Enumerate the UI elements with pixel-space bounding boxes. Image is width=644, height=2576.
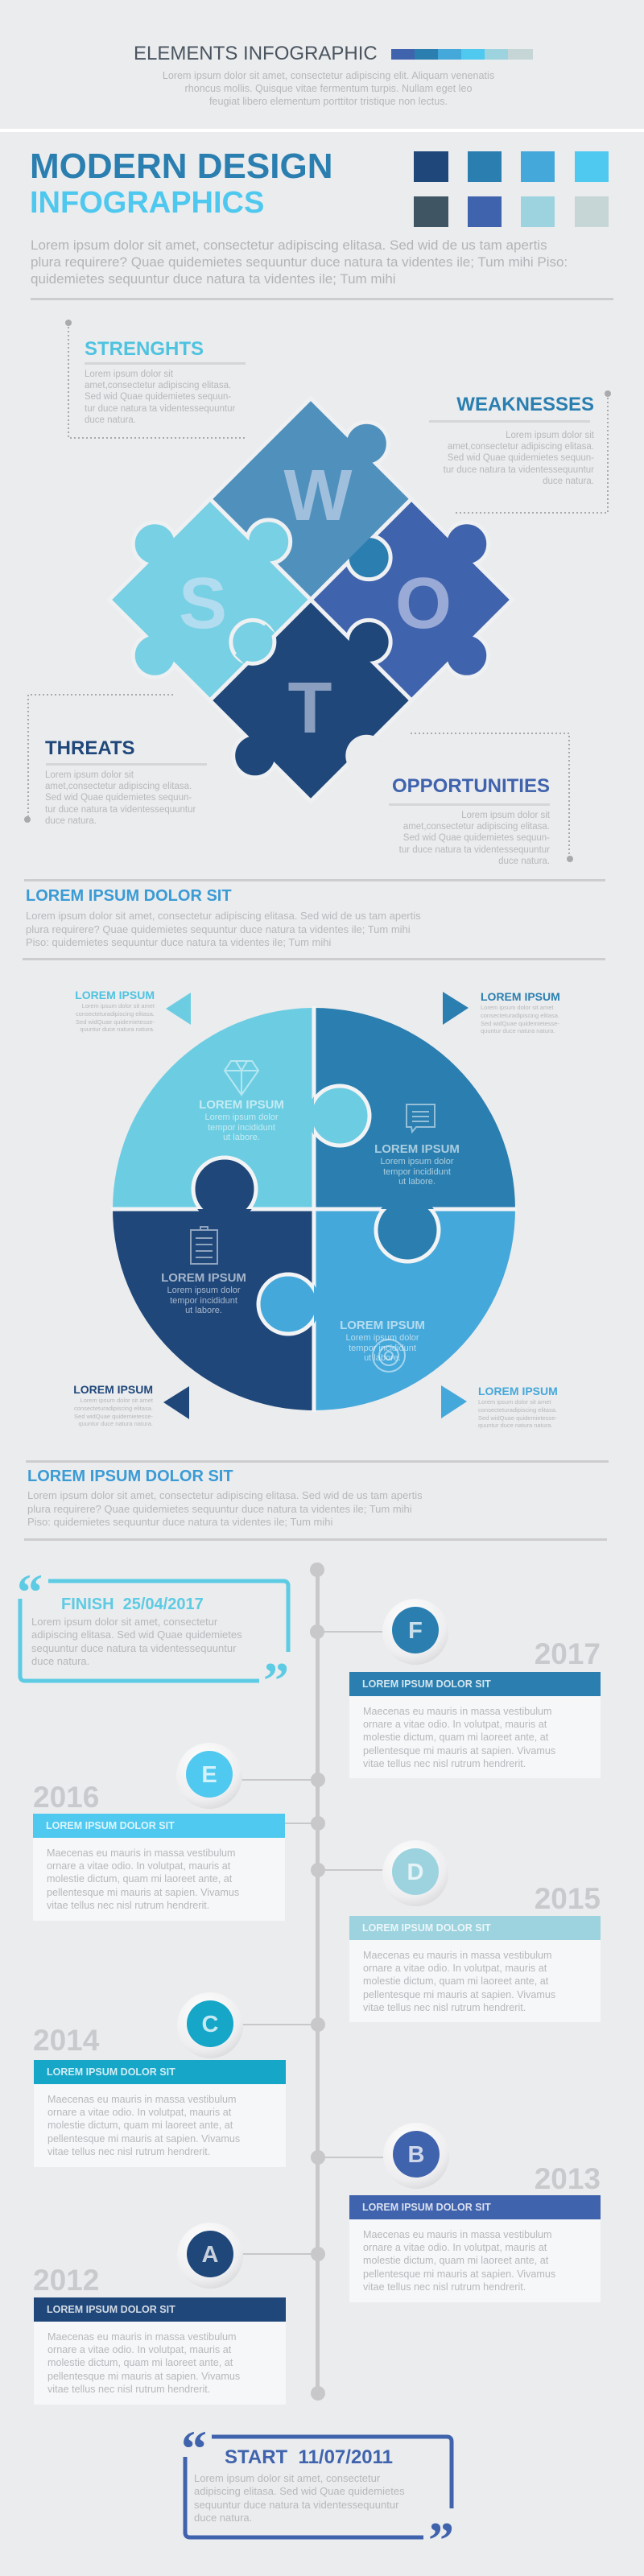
swot: strengths: Lorem ipsum dolor sit <box>85 369 173 379</box>
swot: strengths: Sed wid Quae quidemietes sequun- <box>85 392 231 402</box>
side label TL: quuntur duce natura natura. <box>80 1026 155 1033</box>
card C: pellentesque mi mauris at sapien. Vivamus <box>47 2133 240 2145</box>
card A: ornare a vitae odio. In volutpat, mauris at <box>47 2344 231 2355</box>
finish callout: “ <box>17 1563 43 1620</box>
icon: target <box>373 1340 405 1372</box>
icon: clipboard <box>191 1227 217 1264</box>
side label BL: Lorem ipsum dolor sit amet <box>80 1397 153 1404</box>
side label TR: LOREM IPSUM <box>481 990 560 1003</box>
timeline circles: B <box>408 2142 424 2168</box>
finish callout <box>17 1563 289 1709</box>
swot: opportunities: Sed wid Quae quidemietes sequun- <box>403 833 550 843</box>
card D: vitae tellus nec nisl rutrum hendrerit. <box>363 2002 526 2013</box>
swot: weaknesses: Lorem ipsum dolor sit <box>506 431 594 440</box>
card D: molestie dictum, quam mi laoreet ante, at <box>363 1975 548 1987</box>
card A: vitae tellus nec nisl rutrum hendrerit. <box>47 2384 210 2395</box>
subtitle: INFOGRAPHICS <box>30 186 264 220</box>
finish callout: Lorem ipsum dolor sit amet, consectetur <box>31 1616 217 1628</box>
card C: ornare a vitae odio. In volutpat, mauris at <box>47 2107 231 2118</box>
swot dotted connectors <box>28 323 608 859</box>
circle piece texts: tempor incididunt <box>208 1122 275 1132</box>
card D: LOREM IPSUM DOLOR SIT <box>362 1922 491 1934</box>
circle piece texts <box>199 1098 284 1142</box>
text: tempor incididunt <box>349 1343 416 1352</box>
header subtext: Lorem ipsum dolor sit amet, consectetur adipiscing elit. Aliquam venenatis <box>163 70 494 81</box>
card F: vitae tellus nec nisl rutrum hendrerit. <box>363 1758 526 1769</box>
finish callout: FINISH 25/04/2017 <box>61 1596 204 1613</box>
side label TL: LOREM IPSUM <box>75 989 155 1001</box>
finish callout: adipiscing elitasa. Sed wid Quae quidemietes <box>31 1629 242 1641</box>
card F: Maecenas eu mauris in massa vestibulum <box>363 1706 552 1717</box>
section 2 paragraph: plura requirere? Quae quidemietes sequuntur duce natura ta videntes ile; Tum mihi <box>26 923 411 935</box>
text: LOREM IPSUM <box>161 1271 246 1285</box>
side arrows <box>163 992 469 1419</box>
card D: pellentesque mi mauris at sapien. Vivamus <box>363 1989 555 2000</box>
section 2 paragraph: Piso: quidemietes sequuntur duce natura ta videntes ile; Tum mihi <box>26 936 331 948</box>
side label BR: quuntur duce natura natura. <box>478 1422 553 1429</box>
swot: threats: duce natura. <box>45 816 97 826</box>
text: LOREM IPSUM <box>340 1319 425 1332</box>
card B: pellentesque mi mauris at sapien. Vivamus <box>363 2268 555 2280</box>
swot: opportunities: duce natura. <box>498 857 550 866</box>
color swatches <box>414 151 609 227</box>
swot: threats <box>45 737 196 826</box>
swot letters <box>179 456 452 749</box>
timeline line <box>242 1563 383 2401</box>
side label BL: quuntur duce natura natura. <box>78 1420 153 1427</box>
intro paragraph: quidemietes sequuntur duce natura ta videntes ile; Tum mihi <box>31 271 396 287</box>
year 2012: 2012 <box>33 2264 99 2297</box>
header subtext <box>163 70 494 107</box>
card D: Maecenas eu mauris in massa vestibulum <box>363 1950 552 1961</box>
card C: molestie dictum, quam mi laoreet ante, at <box>47 2120 233 2131</box>
text: ut labore. <box>185 1306 222 1315</box>
side label TL: Sed widQuae quidemietesse- <box>76 1018 155 1026</box>
finish box border <box>20 1581 288 1681</box>
swot: weaknesses: amet,consectetur adipiscing elitasa. <box>448 442 594 452</box>
card B: LOREM IPSUM DOLOR SIT <box>362 2202 491 2213</box>
card E <box>33 1814 285 1921</box>
swot: threats: Sed wid Quae quidemietes sequun- <box>45 793 192 803</box>
piece W <box>210 378 432 600</box>
side label BR <box>478 1385 558 1429</box>
swot: weaknesses: Sed wid Quae quidemietes sequun- <box>448 453 594 463</box>
swot puzzle <box>68 357 553 842</box>
swot: opportunities: tur duce natura ta videntessequuntur <box>399 845 550 855</box>
timeline circles: E <box>201 1762 217 1788</box>
swot: threats: THREATS <box>45 737 135 759</box>
timeline circles: D <box>407 1860 423 1885</box>
card E: ornare a vitae odio. In volutpat, mauris at <box>47 1860 230 1872</box>
icon: diamond <box>225 1061 258 1095</box>
circle puzzle <box>111 1006 517 1412</box>
finish callout: duce natura. <box>31 1655 89 1667</box>
swot: threats: Lorem ipsum dolor sit <box>45 770 134 780</box>
intro paragraph <box>31 237 568 287</box>
start callout: sequuntur duce natura ta videntessequuntur <box>194 2499 398 2511</box>
card D: ornare a vitae odio. In volutpat, mauris at <box>363 1963 547 1974</box>
start callout <box>181 2420 454 2569</box>
year 2017: 2017 <box>535 1637 601 1670</box>
header title: ELEMENTS INFOGRAPHIC <box>134 43 378 64</box>
side label BR: LOREM IPSUM <box>478 1385 558 1397</box>
start callout: duce natura. <box>194 2512 252 2524</box>
circle piece texts: Lorem ipsum dolor <box>204 1113 279 1122</box>
piece O <box>311 478 553 721</box>
side label TR: Sed widQuae quidemietesse- <box>481 1020 559 1027</box>
header subtext: feugiat libero elementum porttitor tristique non lectus. <box>209 96 448 107</box>
circle piece texts: LOREM IPSUM <box>199 1098 284 1112</box>
swot: opportunities: amet,consectetur adipiscing elitasa. <box>403 822 550 832</box>
side label TR <box>481 990 560 1034</box>
timeline circles <box>176 1599 449 2289</box>
card F: pellentesque mi mauris at sapien. Vivamus <box>363 1745 555 1757</box>
timeline circles: C <box>202 2012 219 2037</box>
swot: opportunities: OPPORTUNITIES <box>392 775 550 797</box>
side label TL: Lorem ipsum dolor sit amet <box>82 1002 155 1009</box>
year 2016: 2016 <box>33 1781 99 1814</box>
swot: opportunities: Lorem ipsum dolor sit <box>461 811 550 820</box>
section dividers <box>23 879 609 1541</box>
start box border <box>185 2437 452 2537</box>
swot letters: T <box>288 668 332 749</box>
text: Lorem ipsum dolor <box>380 1157 454 1166</box>
icon: chat bubble <box>407 1104 435 1132</box>
swot: strengths: STRENGHTS <box>85 338 204 360</box>
card F <box>349 1672 601 1778</box>
section 3 paragraph: plura requirere? Quae quidemietes sequuntur duce natura ta videntes ile; Tum mihi <box>27 1502 412 1515</box>
card F: molestie dictum, quam mi laoreet ante, at <box>363 1732 548 1743</box>
card B <box>349 2195 601 2302</box>
side label BL: consecteturadipiscing elitasa. <box>74 1405 153 1412</box>
text: ut labore. <box>398 1177 436 1187</box>
text: Lorem ipsum dolor <box>167 1286 241 1295</box>
section 3 paragraph <box>27 1489 423 1528</box>
card E: vitae tellus nec nisl rutrum hendrerit. <box>47 1900 209 1911</box>
year 2013: 2013 <box>535 2162 601 2195</box>
side label BL: LOREM IPSUM <box>73 1383 153 1396</box>
card C: Maecenas eu mauris in massa vestibulum <box>47 2094 237 2105</box>
start callout: adipiscing elitasa. Sed wid Quae quidemietes <box>194 2485 405 2497</box>
card A <box>34 2297 286 2405</box>
swot: weaknesses: duce natura. <box>543 477 594 486</box>
year 2015: 2015 <box>535 1882 601 1915</box>
card B: ornare a vitae odio. In volutpat, mauris at <box>363 2242 547 2253</box>
header subtext: rhoncus mollis. Quisque vitae fermentum turpis. Nullam eget leo <box>185 83 472 94</box>
start callout: ” <box>428 2512 454 2569</box>
card C: vitae tellus nec nisl rutrum hendrerit. <box>47 2146 210 2157</box>
piece S <box>68 478 311 721</box>
finish callout: ” <box>263 1652 289 1709</box>
card C <box>34 2060 286 2167</box>
side label TR: Lorem ipsum dolor sit amet <box>481 1004 553 1011</box>
start callout: START 11/07/2011 <box>225 2446 393 2468</box>
swot: threats: amet,consectetur adipiscing elitasa. <box>45 782 192 791</box>
finish callout: sequuntur duce natura ta videntessequuntur <box>31 1642 236 1654</box>
swot: weaknesses: WEAKNESSES <box>456 394 594 415</box>
side label BR: Sed widQuae quidemietesse- <box>478 1414 557 1422</box>
swot: strengths <box>85 338 235 425</box>
card B: vitae tellus nec nisl rutrum hendrerit. <box>363 2281 526 2293</box>
card D <box>349 1916 601 2022</box>
card A: LOREM IPSUM DOLOR SIT <box>47 2304 175 2315</box>
text: LOREM IPSUM <box>374 1142 460 1156</box>
card B: molestie dictum, quam mi laoreet ante, at <box>363 2255 548 2266</box>
card E: pellentesque mi mauris at sapien. Vivamus <box>47 1887 239 1898</box>
start callout: “ <box>181 2420 207 2477</box>
swot: strengths: amet,consectetur adipiscing elitasa. <box>85 381 231 390</box>
text: tempor incididunt <box>170 1296 237 1306</box>
card F: ornare a vitae odio. In volutpat, mauris at <box>363 1719 547 1730</box>
side label BR: consecteturadipiscing elitasa. <box>478 1406 557 1414</box>
card F: LOREM IPSUM DOLOR SIT <box>362 1678 491 1690</box>
swot: weaknesses: tur duce natura ta videntessequuntur <box>444 465 594 475</box>
side label TL: consecteturadipiscing elitasa. <box>76 1010 155 1018</box>
timeline circles: A <box>202 2242 219 2268</box>
section 2 paragraph: Lorem ipsum dolor sit amet, consectetur adipiscing elitasa. Sed wid de us tam apertis <box>26 910 421 922</box>
section 3 paragraph: Piso: quidemietes sequuntur duce natura ta videntes ile; Tum mihi <box>27 1516 332 1528</box>
side label TR: quuntur duce natura natura. <box>481 1027 555 1034</box>
text: tempor incididunt <box>383 1167 451 1177</box>
section 3 paragraph: Lorem ipsum dolor sit amet, consectetur adipiscing elitasa. Sed wid de us tam apertis <box>27 1489 423 1501</box>
side label BR: Lorem ipsum dolor sit amet <box>478 1398 551 1406</box>
piece T <box>189 600 411 822</box>
swot: threats: tur duce natura ta videntessequuntur <box>45 805 196 815</box>
swot letters: W <box>284 456 353 536</box>
section 2 heading: LOREM IPSUM DOLOR SIT <box>26 887 232 905</box>
card A: Maecenas eu mauris in massa vestibulum <box>47 2331 237 2343</box>
main title: MODERN DESIGN <box>30 147 332 186</box>
year 2014: 2014 <box>33 2024 99 2057</box>
card B: Maecenas eu mauris in massa vestibulum <box>363 2229 552 2240</box>
swot: strengths: duce natura. <box>85 415 136 425</box>
intro paragraph: plura requirere? Quae quidemietes sequuntur duce natura ta videntes ile; Tum mihi Piso: <box>31 254 568 270</box>
section 2 paragraph <box>26 910 421 948</box>
text: Lorem ipsum dolor <box>345 1333 419 1343</box>
timeline circles: F <box>408 1618 423 1644</box>
circle piece texts: ut labore. <box>223 1133 260 1142</box>
top white divider <box>0 129 644 132</box>
side label BL <box>73 1383 153 1427</box>
color bar <box>391 49 533 60</box>
swot: weaknesses <box>443 394 594 486</box>
card E: molestie dictum, quam mi laoreet ante, at <box>47 1873 232 1885</box>
side label TL <box>75 989 155 1033</box>
swot: opportunities <box>392 775 550 866</box>
text: ut labore. <box>364 1353 401 1363</box>
card E: Maecenas eu mauris in massa vestibulum <box>47 1847 235 1859</box>
swot letters: S <box>179 564 227 644</box>
swot: strengths: tur duce natura ta videntessequuntur <box>85 404 235 414</box>
intro paragraph: Lorem ipsum dolor sit amet, consectetur adipiscing elitasa. Sed wid de us tam apertis <box>31 237 547 253</box>
side label TR: consecteturadipiscing elitasa. <box>481 1012 559 1019</box>
card A: pellentesque mi mauris at sapien. Vivamus <box>47 2371 240 2382</box>
card E: LOREM IPSUM DOLOR SIT <box>46 1820 175 1831</box>
swot letters: O <box>395 564 452 644</box>
side label BL: Sed widQuae quidemietesse- <box>74 1413 153 1420</box>
start callout: Lorem ipsum dolor sit amet, consectetur <box>194 2472 380 2484</box>
card C: LOREM IPSUM DOLOR SIT <box>47 2066 175 2078</box>
card A: molestie dictum, quam mi laoreet ante, at <box>47 2357 233 2368</box>
section 3 heading: LOREM IPSUM DOLOR SIT <box>27 1468 233 1485</box>
